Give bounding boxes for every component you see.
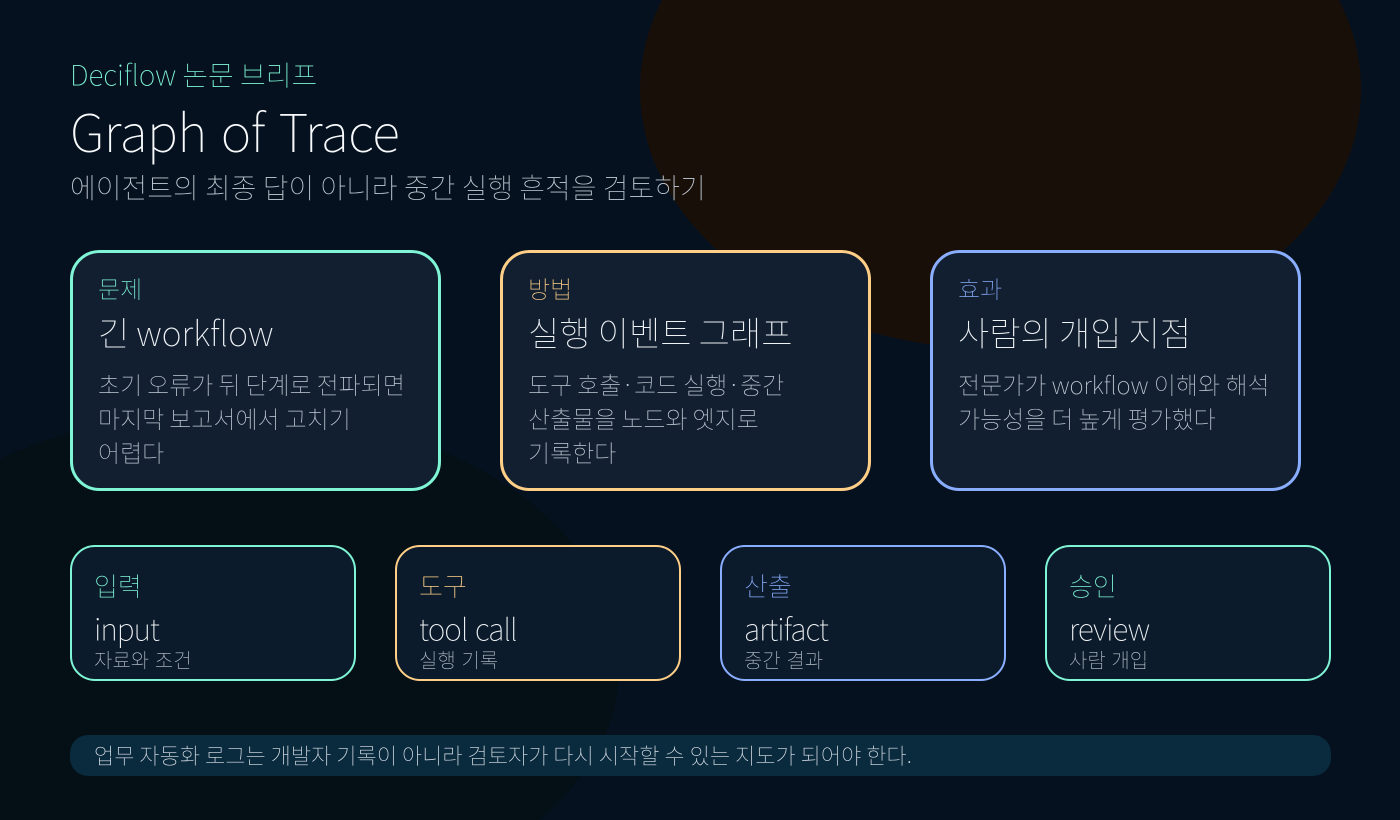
panel body: 어렵다 xyxy=(98,434,164,469)
panel body: 산출물을 노드와 엣지로 xyxy=(528,400,759,435)
step name: tool call xyxy=(419,606,517,650)
step name: input xyxy=(94,606,160,650)
subtitle: 에이전트의 최종 답이 아니라 중간 실행 흔적을 검토하기 xyxy=(70,167,706,207)
background shape: warm ellipse xyxy=(640,0,1361,349)
panel body: 도구 호출 xyxy=(528,366,621,401)
step label: 입력 xyxy=(94,567,142,604)
panel body: 전문가가 workflow 이해와 해석 xyxy=(958,366,1270,401)
panel: effect xyxy=(932,252,1300,490)
step note: 실행 기록 xyxy=(419,644,498,674)
eyebrow: Deciflow 논문 브리프 xyxy=(70,54,317,94)
panel body: 초기 오류가 뒤 단계로 전파되면 xyxy=(98,366,405,401)
panel: method xyxy=(502,252,870,490)
background shape: green ellipse xyxy=(0,410,620,820)
step label: 도구 xyxy=(419,567,467,604)
step note: 중간 결과 xyxy=(744,644,823,674)
step name: review xyxy=(1069,606,1150,650)
panel label: 효과 xyxy=(958,270,1002,305)
panel label: 문제 xyxy=(98,270,142,305)
panel body: 기록한다 xyxy=(528,434,616,469)
panel: problem xyxy=(72,252,440,490)
panel label: 방법 xyxy=(528,270,572,305)
panel body: ·코드 실행·중간 xyxy=(625,366,784,401)
takeaway text: 업무 자동화 로그는 개발자 기록이 아니라 검토자가 다시 시작할 수 있는 지도가 되어야 한다. xyxy=(94,739,912,771)
step label: 승인 xyxy=(1069,567,1117,604)
step note: 자료와 조건 xyxy=(94,644,192,674)
step card: artifact xyxy=(721,546,1005,680)
panel heading: 긴 workflow xyxy=(98,307,273,356)
step card: tool call xyxy=(396,546,680,680)
title: Graph of Trace xyxy=(70,92,399,167)
step note: 사람 개입 xyxy=(1069,644,1148,674)
step label: 산출 xyxy=(744,567,792,604)
takeaway bar xyxy=(70,735,1331,776)
step card: review xyxy=(1046,546,1330,680)
panel heading: 실행 이벤트 그래프 xyxy=(528,307,792,356)
step name: artifact xyxy=(744,606,829,650)
panel body: 마지막 보고서에서 고치기 xyxy=(98,400,351,435)
panel body: 가능성을 더 높게 평가했다 xyxy=(958,400,1216,435)
panel heading: 사람의 개입 지점 xyxy=(958,307,1191,356)
step card: input xyxy=(71,546,355,680)
